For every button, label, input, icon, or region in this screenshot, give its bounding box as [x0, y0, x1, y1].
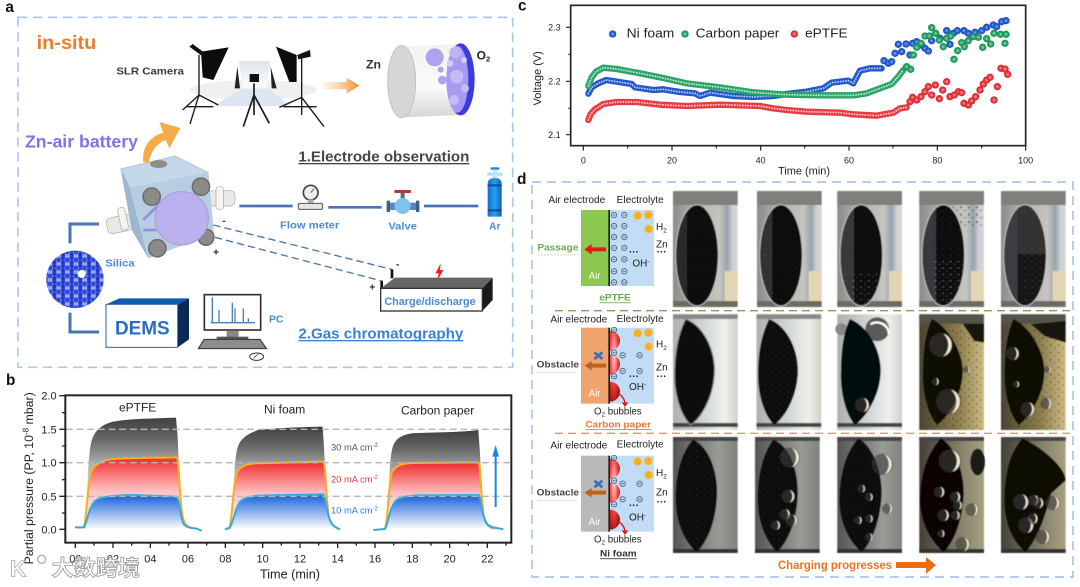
x axis tick labels: 04 [144, 553, 156, 565]
panel b: partial pressure chart [6, 372, 511, 582]
icon: PC with chromatogram [198, 295, 267, 360]
schematic: Ni foam: bubbles [605, 534, 642, 545]
y axis tick labels: 0.0 [41, 524, 57, 536]
photo row 1 col 2 [757, 191, 822, 307]
photo row 2 col 3 [835, 314, 902, 430]
heading 2.Gas chromatography: 2.Gas chromatography [298, 325, 464, 342]
schematic: Ni foam: 2 [602, 540, 606, 547]
y axis tick labels: 1.5 [41, 424, 57, 436]
x axis tick labels: 08 [219, 553, 231, 565]
x axis tick labels: 10 [257, 553, 269, 565]
icon: silica spheres [46, 251, 104, 308]
schematic: Carbon paper [537, 314, 668, 430]
series labels: Ni foam [264, 402, 305, 416]
label Zn: Zn [366, 58, 381, 72]
icon: Zn-air battery cube [105, 156, 235, 258]
icon: charge and discharge box [380, 263, 493, 311]
y axis tick labels: 2.3 [548, 23, 561, 33]
schematic: Carbon paper: Carbon paper [585, 419, 651, 429]
x axis tick labels: 16 [369, 553, 381, 565]
schematic: Carbon paper: Air [589, 388, 601, 399]
schematic: Ni foam: Air electrode [550, 440, 607, 451]
dashed border of panel a [18, 17, 513, 367]
label O2: 2 [486, 55, 490, 64]
x axis tick labels: 60 [844, 155, 854, 165]
photo row 2 col 4 [919, 314, 984, 430]
label O2: O [477, 48, 486, 62]
polarity signs: - [396, 259, 399, 270]
brackets to silica and DEMS [70, 224, 99, 332]
y axis tick labels [41, 391, 57, 536]
label SLR Camera: SLR Camera [116, 67, 184, 78]
x axis tick labels: 40 [756, 155, 766, 165]
dashed border of panel d [532, 182, 1073, 577]
x axis tick labels: 14 [332, 553, 344, 565]
schematic: Ni foam: Air [589, 517, 601, 528]
schematic: ePTFE: Air electrode [548, 195, 605, 206]
arrow: charging direction [896, 557, 936, 574]
gas line from cell to argon [239, 206, 478, 207]
series labels [119, 401, 474, 417]
icon: DEMS box [106, 298, 189, 347]
schematic: ePTFE: Electrolyte [617, 195, 664, 206]
polarity signs: + [369, 283, 375, 294]
schematic: Ni foam: Zn [656, 488, 668, 499]
photo row 1 col 1 [673, 191, 738, 307]
photo row 3 col 2 [755, 437, 820, 553]
x axis tick labels [69, 553, 493, 565]
photo row 3 col 3 [837, 437, 902, 553]
panel letter b: b [6, 372, 15, 389]
label Charging progresses: Charging progresses [778, 558, 892, 572]
photo row 1 col 5 [1001, 191, 1068, 307]
y axis title: mbar) [22, 392, 36, 428]
schematic: Ni foam: Obstacle [537, 488, 579, 498]
schematic: Carbon paper: 2 [663, 345, 667, 352]
current density labels: -2 [372, 475, 378, 481]
x axis tick labels [581, 155, 1033, 165]
photo row 2 col 1 [673, 314, 738, 430]
schematic: Ni foam: Ni foam [600, 549, 637, 559]
x axis tick labels: 06 [182, 553, 194, 565]
photo row 2 col 2 [756, 314, 821, 430]
legend: ePTFE [805, 25, 848, 40]
schematic: Carbon paper: 2 [602, 412, 606, 419]
schematic: Ni foam [537, 440, 668, 559]
schematic: Ni foam: - [644, 512, 646, 519]
schematic: ePTFE [537, 195, 668, 303]
schematic: ePTFE: 2 [663, 227, 667, 234]
electrical dashed leads [213, 225, 392, 281]
x axis tick labels: 20 [444, 553, 456, 565]
y axis tick labels [548, 23, 561, 140]
arrow: curved orange up to camera [143, 122, 180, 162]
icon: DEMS box: DEMS [115, 318, 170, 339]
axes frame and ticks [59, 395, 511, 548]
schematic: ePTFE: OH [632, 259, 647, 270]
icon: photo studio with lights and camera [183, 44, 324, 127]
schematic: Carbon paper: Zn [656, 362, 668, 373]
y axis title: Partial pressure (PP, 10 [22, 435, 36, 564]
y axis tick labels: 2.0 [41, 391, 57, 403]
ePTFE curves [75, 418, 202, 531]
schematics of three electrodes [537, 195, 668, 559]
heading 1.Electrode observation: 1.Electrode observation [298, 148, 469, 165]
Ni foam curves [225, 427, 340, 529]
schematic: ePTFE: ePTFE [599, 293, 631, 303]
schematic: Ni foam: ··· [657, 497, 667, 508]
photo row 3 col 5 [1001, 437, 1066, 553]
label Ar: Ar [489, 221, 500, 232]
schematic: Carbon paper: O [594, 406, 602, 417]
y axis tick labels: 2.2 [548, 77, 561, 87]
x axis title: Time (min) [260, 568, 320, 582]
schematic: Carbon paper: - [644, 382, 646, 389]
icon: flow meter [298, 185, 323, 209]
watermark: 大数跨境 [52, 557, 140, 581]
series: Carbon paper [588, 24, 1010, 95]
schematic: Ni foam: OH [629, 512, 644, 523]
schematic: Carbon paper: ··· [657, 371, 667, 382]
schematic: Carbon paper: OH [629, 382, 644, 393]
schematic: ePTFE: Passage [537, 242, 578, 252]
schematic: ePTFE: ··· [657, 247, 667, 258]
panel letter d: d [517, 171, 526, 188]
y axis tick labels: 0.5 [41, 491, 57, 503]
watermark [10, 555, 140, 582]
icon: argon cylinder [487, 167, 502, 217]
x axis tick labels: 22 [481, 553, 493, 565]
photo row 3 col 1 [673, 437, 738, 553]
schematic: Carbon paper: Electrolyte [617, 314, 664, 325]
schematic: ePTFE: ··· [629, 247, 639, 258]
photo row 2 col 5 [1001, 314, 1066, 430]
schematic: Carbon paper: ··· [629, 371, 639, 382]
x axis title: Time (min) [778, 165, 830, 177]
schematic: Carbon paper: Air electrode [550, 315, 607, 326]
panel d: charging observations [532, 182, 1073, 577]
legend [609, 25, 848, 40]
series labels: Carbon paper [401, 403, 474, 417]
x axis tick labels: 12 [294, 553, 306, 565]
series labels: ePTFE [119, 401, 156, 415]
schematic: ePTFE: H [656, 222, 663, 233]
panel a: in-situ setup [5, 0, 513, 367]
label Flow meter: Flow meter [280, 220, 339, 231]
label PC: PC [269, 315, 284, 326]
x axis tick labels: 00 [69, 553, 81, 565]
x axis tick labels: 18 [406, 553, 418, 565]
heading Zn-air battery: Zn-air battery [25, 132, 138, 152]
label Silica: Silica [105, 259, 135, 270]
y axis title: -8 [22, 427, 31, 435]
photo row 1 col 3 [837, 191, 904, 308]
schematic: ePTFE: - [647, 258, 649, 265]
polarity signs: - [222, 216, 226, 227]
schematic: Carbon paper: bubbles [605, 406, 642, 417]
current density labels [331, 442, 378, 516]
schematic: Carbon paper: Obstacle [537, 360, 579, 370]
x axis tick labels: 0 [581, 155, 586, 165]
schematic: ePTFE: Air [589, 271, 601, 282]
panel c: voltage chart [518, 0, 1033, 177]
y axis tick labels: 2.1 [548, 130, 561, 140]
heading in-situ: in-situ [37, 33, 96, 54]
schematic: Ni foam: H [656, 468, 663, 479]
schematic: Carbon paper: H [656, 340, 663, 351]
Carbon paper curves [373, 430, 503, 530]
icon: Zn-air cell with oxygen bubbles [388, 43, 475, 118]
photo grid of charging frames [673, 191, 1068, 553]
x axis tick labels: 80 [932, 155, 942, 165]
legend: Carbon paper [696, 25, 780, 40]
x axis tick labels: 100 [1018, 155, 1033, 165]
arrow: increasing current [492, 445, 499, 507]
label Valve: Valve [388, 221, 417, 232]
current density labels: 20 mA cm [331, 474, 372, 484]
current density labels: -2 [372, 506, 378, 512]
icon: valve [387, 190, 419, 214]
schematic: Ni foam: O [594, 534, 602, 545]
legend: Ni foam [627, 25, 674, 40]
schematic: Ni foam: ··· [629, 500, 639, 511]
y axis tick labels: 1.0 [41, 458, 57, 470]
current density labels: -2 [372, 443, 378, 449]
current density labels: 10 mA cm [331, 506, 372, 516]
axes frame and ticks [566, 5, 1026, 151]
arrow: orange to cell [323, 78, 359, 94]
photo row 1 col 4 [919, 191, 986, 308]
x axis tick labels: 20 [667, 155, 677, 165]
schematic: ePTFE: Zn [656, 239, 668, 250]
photo row 3 col 4 [919, 437, 985, 553]
schematic: Ni foam: 2 [663, 473, 667, 480]
polarity signs [213, 216, 399, 294]
polarity signs: + [213, 248, 219, 259]
watermark: K [10, 556, 27, 582]
icon: charge and discharge box: Charge/discharge [384, 296, 476, 308]
current density labels: 30 mA cm [331, 442, 372, 452]
y axis title: Voltage (V) [532, 51, 544, 106]
series: ePTFE [588, 65, 1011, 120]
schematic: Ni foam: Electrolyte [617, 440, 664, 451]
x axis tick labels: 02 [107, 553, 119, 565]
series: Ni foam [588, 17, 1010, 97]
